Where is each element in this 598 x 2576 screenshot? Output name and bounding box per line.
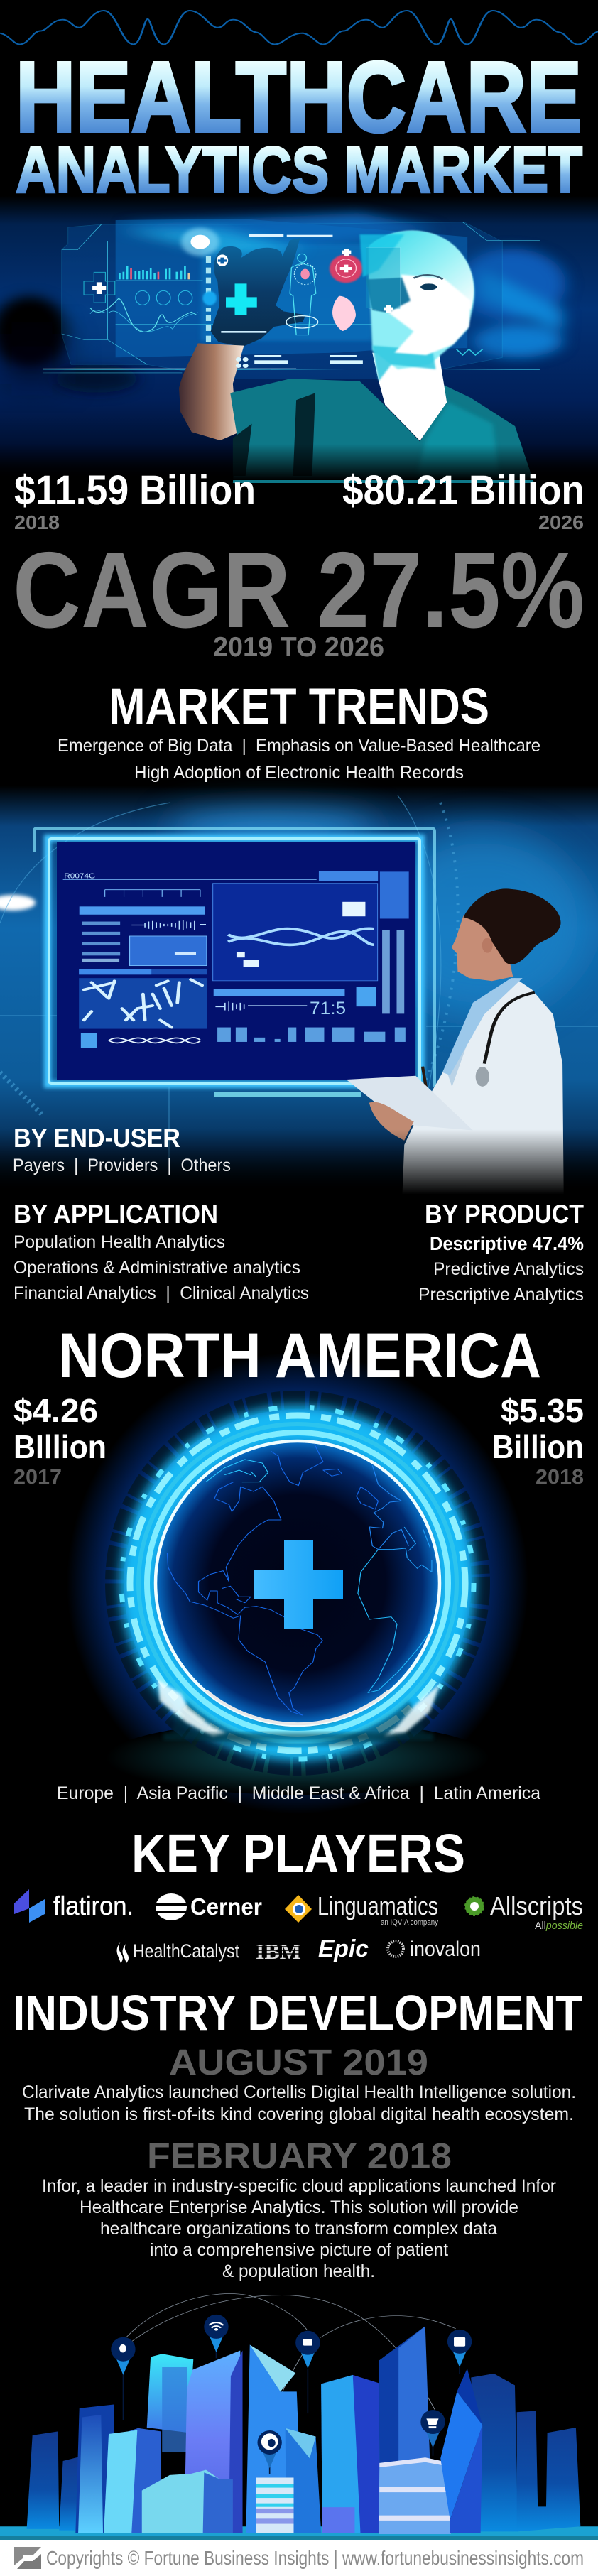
development text three [42,2176,556,2281]
CAGR period: 2019 TO 2026 [213,632,384,663]
British Isles [357,1487,378,1509]
overlay screen [366,247,401,310]
2018 label: 2018 [536,1466,584,1489]
purple central tower [184,2351,243,2533]
chromosomes [84,979,202,1028]
development text one: Clarivate Analytics launched Cortellis Digital Health Intelligence solution. [22,2082,576,2102]
stat: 2026 market size: $80.21 Billion [342,467,585,513]
slider [221,331,267,333]
end-user list: Payers | Providers | Others [13,1156,231,1175]
diagonal glow streak [119,229,309,256]
segmented rings [121,1407,474,1759]
lower white highlights [158,1680,440,1737]
globe glow [67,1352,528,1814]
panel lines [43,222,540,373]
background light streaks [0,213,566,393]
progress bar [79,969,207,974]
application item one: Population Health Analytics [13,1232,225,1252]
hero background [0,196,598,480]
continents outline [167,1444,432,1715]
Africa [358,1550,430,1692]
logo: Cerner [156,1893,262,1920]
neck shadow [372,346,436,381]
heading: by application: BY APPLICATION [13,1200,218,1229]
application item two: Operations & Administrative analytics [13,1258,300,1278]
pin: shopping cart [420,2410,445,2456]
development text three: Healthcare Enterprise Analytics. This solution will provide [80,2197,518,2217]
pin: chat [295,2331,320,2413]
heading: by end-user: BY END-USER [13,1124,180,1153]
Americas [167,1482,322,1715]
far-left towers [27,2431,78,2531]
date: August 2019: AUGUST 2019 [169,2042,428,2082]
panel bright centre [201,244,372,341]
heading: North America: NORTH AMERICA [58,1320,541,1391]
bar chart [119,266,190,279]
data text block [237,902,365,967]
logo: Linguamatics [285,1891,438,1927]
panel: glowing globe [67,1352,528,1814]
medical cross [254,1540,343,1629]
year 2018: 2018 [14,511,60,533]
ground band [0,2526,598,2539]
2017 value: $4.26 [13,1392,98,1429]
screen contents [63,871,409,1048]
stethoscope head [476,1067,489,1087]
pin: wifi [204,2315,229,2358]
Greenland [271,1444,323,1486]
product item two: Predictive Analytics [433,1259,584,1279]
right tall tower [379,2326,430,2464]
logo: Allscripts [464,1891,583,1932]
ear [482,938,493,953]
neck [372,353,447,441]
data strip [236,355,363,368]
other regions list: Europe | Asia Pacific | Middle East & Africa | Latin America [57,1783,540,1803]
development text three: healthcare organizations to transform complex data [100,2219,497,2239]
sidebar icons [206,256,211,342]
screen stand [214,1092,361,1097]
pin: globe [257,2430,282,2474]
scrub folds [233,393,315,476]
shirt [442,978,523,1075]
crystal tower [246,2345,315,2533]
eyebrow [413,275,442,279]
X button [357,987,376,1006]
dashboard header [249,234,332,237]
logo: Allscripts: Allscripts [490,1891,583,1920]
main panel [116,219,467,357]
pen [423,1067,426,1089]
thumbnail [81,1033,97,1048]
trend line one: Emergence of Big Data | Emphasis on Value-Based Healthcare [58,736,540,756]
application item three: Financial Analytics | Clinical Analytics [13,1283,309,1303]
diamond glass tower [440,2369,482,2533]
glowing side icon [202,291,217,305]
front right block [379,2457,451,2534]
2018 value: $5.35 [501,1392,584,1429]
left panel [62,222,502,379]
logo: Allscripts: Allpossible [535,1920,583,1932]
left lens glow [0,895,36,911]
blue background [0,786,598,1194]
striped building [256,2477,293,2533]
panel: hero image of nurse at holographic screen [0,196,598,483]
middle tower [321,2375,381,2533]
date: February 2018: FEBRUARY 2018 [147,2136,452,2176]
bottom ring inner line [206,1690,389,1724]
eye [420,283,437,290]
2018 unit: Billion [492,1428,584,1465]
coat shadow [446,1017,477,1087]
2017 unit: BIllion [13,1428,107,1465]
gloved hand [211,238,306,347]
Caribbean [222,1586,251,1603]
vertical meters [382,930,404,1013]
surgical cap [369,231,474,310]
heading: market trends: MARKET TRENDS [109,679,489,735]
background glows [166,814,589,1016]
lens flare [181,228,219,256]
Mediterranean [378,1527,432,1572]
stat: 2018 market size: $11.59 Billion [14,467,256,513]
readout waveform [215,1001,307,1011]
footer logo [14,2547,41,2569]
development text two: The solution is first-of-its kind covering global digital health ecosystem. [24,2104,574,2124]
head base [369,231,474,369]
bottom bars [217,1028,406,1042]
year 2026: 2026 [538,511,584,533]
icon with cross [217,254,228,266]
monitor glowing frame [48,838,421,1085]
heart in body scan [294,263,316,285]
heading: by product: BY PRODUCT [425,1200,584,1229]
bottom fade [0,444,598,480]
info list [82,922,120,962]
product item three: Prescriptive Analytics [418,1285,584,1305]
hands [369,1102,414,1141]
face [388,275,471,355]
scrub top [230,379,534,483]
cap wide glow [359,234,404,277]
medical cross outline [84,272,115,303]
Iceland [323,1469,342,1476]
tall light tower [75,2404,114,2533]
ECG heartbeat line [0,11,598,44]
logo: Linguamatics: an IQVIA company [381,1918,438,1927]
front low blocks [142,2470,233,2533]
ruler [63,879,317,897]
monitor screen [57,842,415,1080]
scrub highlight [417,403,499,476]
development text three: into a comprehensive picture of patient [150,2240,448,2260]
Arctic islands [206,1460,268,1482]
logo: Linguamatics: Linguamatics [317,1891,438,1920]
wave chart [90,298,197,332]
logo: Flatiron: flatiron. [53,1891,134,1920]
connecting arcs [126,2294,456,2430]
floor grid band [163,1733,433,1740]
hero artwork [0,213,566,483]
trend line two: High Adoption of Electronic Health Records [134,763,464,783]
bright inner ring [156,1441,440,1725]
right column list [380,871,409,918]
bottom fade [0,1129,598,1195]
floor reflection [106,1721,489,1795]
pin: medical kit [447,2330,472,2374]
stethoscope [484,993,535,1064]
waveform [131,920,206,930]
logo: Health Catalyst: HealthCatalyst [133,1940,239,1962]
white cross small [342,249,351,256]
small DNA helix [109,1038,200,1043]
2017 label: 2017 [13,1466,62,1489]
clipboard [347,1076,473,1130]
footer bar [0,2540,598,2576]
logo: Epic: Epic [318,1935,369,1962]
logo: Inovalon: inovalon [410,1938,481,1961]
glass tower [147,2354,193,2452]
logo: Cerner: Cerner [190,1893,262,1920]
Europe [369,1465,408,1550]
background arcs [0,795,598,1165]
body scan figure [286,254,317,335]
dark side of face [366,277,420,315]
skin [452,915,513,981]
development text three: Infor, a leader in industry-specific cloud applications launched Infor [42,2176,556,2196]
logo: Flatiron [14,1889,134,1923]
panel: doctor and monitor [0,786,598,1195]
ground shadow [0,2536,598,2540]
readout number: 71:5 [310,999,346,1018]
overlay cross [384,305,393,313]
hair [463,888,561,964]
grid panel [213,884,378,981]
cyan cross on hand [226,283,257,315]
chromosomes image [79,978,207,1029]
pin: location [111,2337,136,2420]
molecule icon [457,349,483,355]
analysis bar [214,989,344,996]
outer tech ring [114,1400,481,1766]
lower crystal tower [286,2428,321,2533]
lower ring dark band [170,1701,426,1746]
product share: Descriptive 47.4% [430,1233,584,1254]
lab coat [403,978,564,1194]
logo: IBM: IBM [256,1939,301,1964]
monitor outer frame [34,828,435,1087]
large DNA helix [228,928,374,945]
low white tower [104,2428,161,2533]
ring glow [140,1425,455,1741]
left dark edge [0,334,64,384]
card bar [175,952,196,955]
development text three: & population health. [222,2261,375,2281]
arm [179,343,244,440]
top right widget [319,871,378,881]
heading: key players: KEY PLAYERS [131,1823,465,1884]
dial icons [136,290,192,305]
heart illustration [332,296,356,331]
doctor figure [347,888,564,1194]
profile card [130,936,207,966]
red heart scan [330,254,362,283]
dark far right towers [471,2374,580,2531]
header bar [80,906,205,915]
panel: smart city illustration [0,2294,598,2540]
screen ID label: R0074G [64,873,95,880]
